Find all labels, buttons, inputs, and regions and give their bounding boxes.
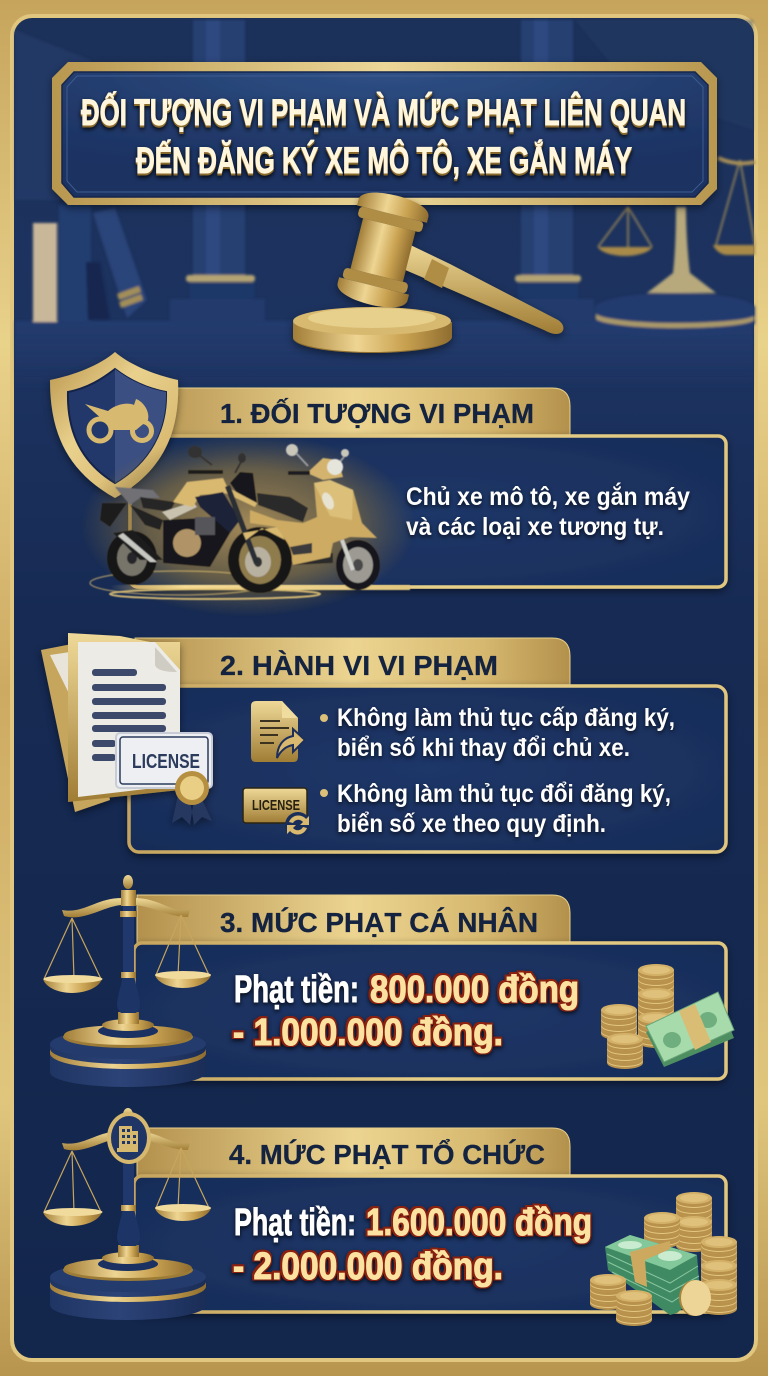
panel 1 tab bbox=[135, 388, 570, 440]
panel 1 text: và các loại xe tương tự. bbox=[406, 513, 664, 541]
building medallion bbox=[107, 1112, 151, 1164]
icon: shield with motorcycle bbox=[50, 352, 178, 498]
panel 1 heading: 1. ĐỐI TƯỢNG VI PHẠM bbox=[220, 397, 534, 429]
panel 2 card bbox=[129, 686, 726, 852]
bullet 1: biển số khi thay đổi chủ xe. bbox=[337, 734, 630, 762]
ground light bbox=[90, 571, 410, 599]
icon: document share bbox=[251, 701, 305, 762]
panel 1: violator bbox=[130, 388, 726, 587]
panel 3 card bbox=[134, 943, 726, 1079]
icon: license plate refresh: LICENSE bbox=[252, 797, 300, 814]
license plate: LICENSE bbox=[132, 751, 200, 773]
glow bbox=[80, 433, 416, 617]
panel 4 amount: - 2.000.000 đồng. bbox=[233, 1246, 503, 1288]
license plate bbox=[116, 733, 212, 788]
scooter bbox=[250, 444, 380, 590]
panel 3 amount bbox=[233, 969, 579, 1054]
bullet 2 bbox=[320, 780, 671, 838]
panel 4 amount: 1.600.000 đồng bbox=[366, 1202, 592, 1244]
background courtroom scene bbox=[15, 20, 755, 391]
icon: coins and cash 4 bbox=[590, 1192, 737, 1326]
panel 2: violations bbox=[129, 638, 726, 852]
illustration: motorcycle and scooter bbox=[80, 433, 416, 617]
panel 1 text bbox=[406, 481, 690, 541]
panel 3: individual fine bbox=[134, 895, 726, 1079]
panel 3 tab bbox=[137, 895, 570, 947]
panel 4 heading: 4. MỨC PHẠT TỔ CHỨC bbox=[229, 1139, 545, 1170]
title plaque bbox=[52, 62, 717, 205]
panel 4 tab bbox=[137, 1128, 570, 1180]
panel 2 heading: 2. HÀNH VI VI PHẠM bbox=[220, 650, 498, 681]
seal bbox=[172, 771, 212, 825]
panel 4 amount bbox=[233, 1202, 592, 1288]
icon: coins and cash 3 bbox=[601, 964, 734, 1069]
icon: gavel bbox=[293, 187, 563, 353]
panel 3 amount: Phạt tiền: bbox=[234, 969, 359, 1011]
bullet 2: biển số xe theo quy định. bbox=[337, 810, 606, 838]
panel 1 text: Chủ xe mô tô, xe gắn máy bbox=[406, 481, 690, 511]
panel 3 heading: 3. MỨC PHẠT CÁ NHÂN bbox=[220, 907, 538, 938]
panel 4 card bbox=[134, 1176, 726, 1312]
panel 2 tab bbox=[135, 638, 570, 690]
panel 4: organisation fine bbox=[134, 1128, 726, 1312]
title bbox=[81, 91, 686, 181]
icon: documents with license bbox=[41, 633, 212, 825]
motorcycle bbox=[100, 446, 292, 593]
panel 3 amount: - 1.000.000 đồng. bbox=[233, 1012, 503, 1054]
icon: scales 4 with building medallion bbox=[43, 1108, 211, 1320]
panel 3 amount: 800.000 đồng bbox=[370, 969, 579, 1011]
bullet 2: Không làm thủ tục đổi đăng ký, bbox=[337, 780, 671, 808]
panel 4 amount: Phạt tiền: bbox=[234, 1202, 356, 1244]
icon: license plate refresh bbox=[243, 788, 311, 838]
panel 1 card bbox=[130, 436, 726, 587]
icon: scales 3 bbox=[43, 875, 211, 1087]
bullet 1: Không làm thủ tục cấp đăng ký, bbox=[337, 704, 675, 732]
bullet 1 bbox=[320, 704, 675, 762]
